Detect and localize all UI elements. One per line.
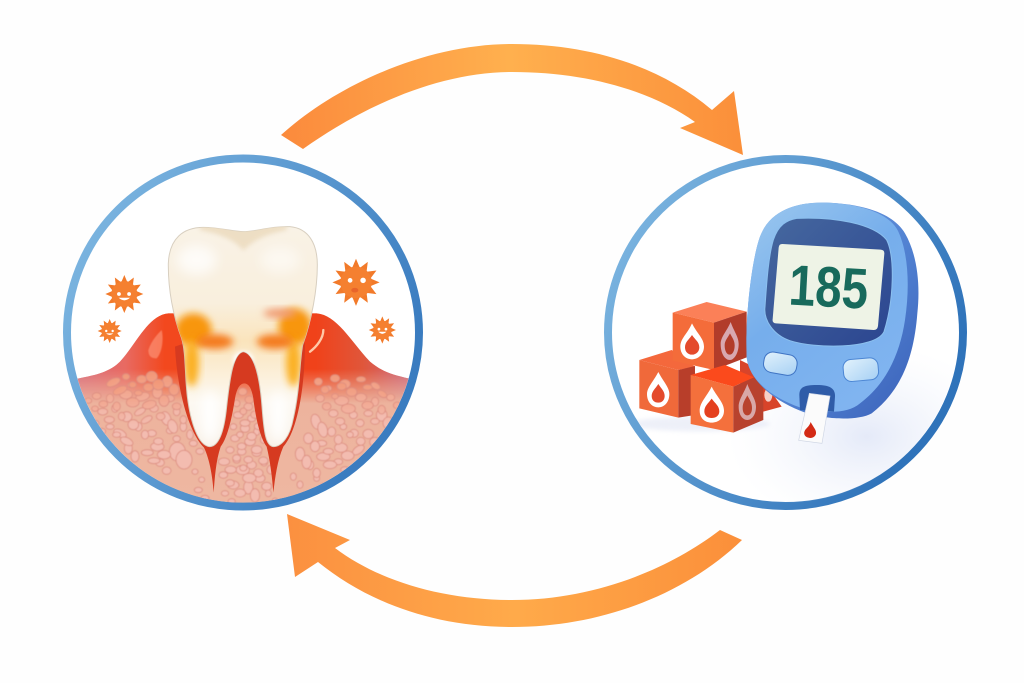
test strip	[799, 393, 830, 443]
arrow: bottom, from glucose meter to tooth	[287, 514, 742, 627]
arrow: top, from tooth to glucose meter	[281, 44, 743, 155]
bacteria, lower right	[369, 316, 396, 344]
bacteria, lower left	[98, 319, 122, 343]
meter body	[746, 203, 918, 443]
button: left	[762, 351, 799, 377]
pores in tissue	[85, 371, 401, 505]
panel: glucose meter	[604, 155, 967, 510]
bone and tissue	[78, 313, 408, 503]
orange staining at tooth neck	[175, 313, 212, 347]
cube: top	[673, 302, 747, 370]
strip port	[799, 385, 835, 412]
red ligament around roots	[175, 337, 305, 493]
cube: front	[691, 365, 763, 433]
bacteria, upper right	[332, 259, 380, 306]
soft floor shadow	[789, 389, 936, 502]
screen bezel	[765, 218, 892, 346]
hidden rear cube	[740, 360, 782, 412]
button: right	[842, 357, 879, 382]
cube: left	[639, 350, 695, 418]
blood drop	[804, 422, 816, 438]
tooth	[168, 225, 317, 447]
panel background circle	[608, 159, 963, 506]
bacteria, upper left	[105, 275, 143, 313]
gum crest highlights	[148, 330, 163, 358]
glucose reading: 185	[787, 254, 870, 322]
illustration: inflamed tooth and gum	[78, 226, 408, 503]
screen	[773, 244, 884, 330]
illustration: meter and sugar cubes	[638, 202, 936, 502]
panel background circle	[67, 158, 419, 506]
swollen gum	[78, 313, 408, 401]
panel: periodontal disease tooth	[60, 158, 427, 517]
